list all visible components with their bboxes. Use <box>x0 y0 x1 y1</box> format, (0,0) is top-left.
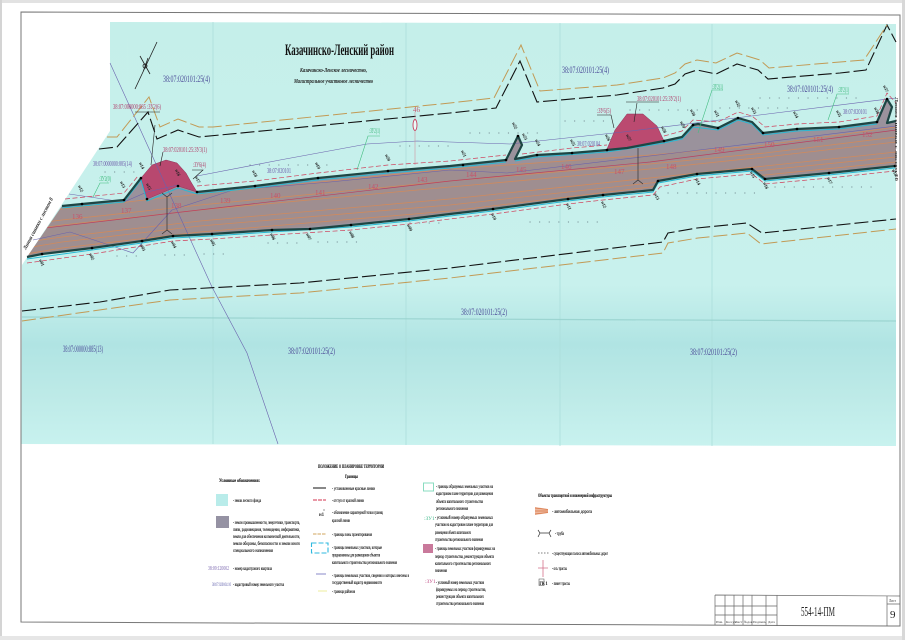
route picket numbers: 151 <box>813 136 824 144</box>
dark boundary lines <box>27 99 896 257</box>
node number labels: н13 <box>653 192 661 202</box>
registered plot item: - границы земельных участков, сведения о которых внесены в <box>332 574 409 579</box>
industrial land text: специального назначения <box>233 549 274 554</box>
forest land background <box>22 22 896 446</box>
node number labels: н12 <box>600 200 608 210</box>
node number labels: н23 <box>521 132 529 142</box>
node number labels: н30 <box>689 108 697 118</box>
temporary plot labels: :ЗУ6(5) <box>597 107 611 115</box>
node number labels: н16 <box>762 181 770 191</box>
node number labels: н22 <box>511 121 519 131</box>
column captions: Лист <box>735 620 743 624</box>
cadastral plot number: 38:07:020104:10 <box>212 582 231 588</box>
design zone item: - границы зоны проектирования <box>332 533 372 538</box>
node number labels: н36 <box>873 106 881 116</box>
node number labels: н16 <box>174 168 182 178</box>
node number labels: н10 <box>490 212 498 222</box>
node number labels: н13 <box>119 180 127 190</box>
route picket numbers: 136 <box>72 213 83 221</box>
panel: map <box>20 22 899 446</box>
industrial land text <box>233 521 300 554</box>
node number labels: н19 <box>314 161 322 171</box>
temporary plot number item: реконструкции объекта капитального <box>436 595 484 600</box>
formed plot labels: :ЗУ2(1) <box>369 127 380 135</box>
map subtitle <box>293 67 373 85</box>
route picket item: - пикет трассы <box>552 582 570 587</box>
node number labels: н12 <box>77 184 85 194</box>
red lines item: - установленные красные линии <box>332 487 375 492</box>
formed plot boundary item: объекта капитального строительства <box>436 500 483 505</box>
drawing code: 554-14-ПМ <box>801 605 835 620</box>
node number labels: н18 <box>251 169 259 179</box>
node number labels: н15 <box>749 170 757 180</box>
route picket numbers: 141 <box>315 189 326 197</box>
node number labels: н01 <box>38 258 46 268</box>
cadastral plot labels: 38:07:020104 <box>577 140 600 148</box>
cadastral plot number: - кадастровый номер земельного участка <box>233 583 284 588</box>
node number labels: н31 <box>713 109 721 119</box>
route picket numbers: 147 <box>614 168 625 176</box>
node number labels: н02 <box>88 252 96 262</box>
route picket numbers: 142 <box>368 183 379 191</box>
formed plot number item: - условный номер образуемых земельных <box>435 516 493 521</box>
cyan under edge <box>27 120 895 259</box>
node number labels: н15 <box>145 182 153 192</box>
temporary plot labels <box>113 95 681 169</box>
cadastral quarter number: 38:09:120002 <box>208 566 229 572</box>
cadastral plot number <box>212 582 284 588</box>
swatch: industrial land <box>216 516 229 528</box>
offset item: - отступ от красной линии <box>332 499 364 504</box>
bracket and leaders <box>135 102 659 179</box>
node number labels: н33 <box>750 106 758 116</box>
formed plot boundary item: - границы образуемых земельных участков на <box>436 485 493 490</box>
infrastructure heading: Объекты транспортной и инженерной инфраструктуры <box>538 494 612 499</box>
outer boundary dashed tan south <box>22 229 896 321</box>
formed plot labels: :ЗУ2(0) <box>99 175 111 183</box>
forest land text: - земли лесного фонда <box>233 499 261 504</box>
node number labels: н04 <box>170 240 178 250</box>
cadastral plot labels: 38:07:020101:25(2) <box>288 346 335 356</box>
swatch: forest land <box>216 494 228 506</box>
temporary plot boundary item: период строительства, реконструкции объекта <box>435 555 494 560</box>
node number labels: н08 <box>348 230 356 240</box>
cadastral plot labels: 38:07:020101:25(2) <box>690 347 737 357</box>
pipe item: - труба <box>555 532 564 537</box>
planning heading: ПОЛОЖЕНИЕ О ПЛАНИРОВКЕ ТЕРРИТОРИИ <box>318 465 384 470</box>
legend heading: Условные обозначения: <box>219 479 260 484</box>
point item <box>319 509 383 524</box>
legend: column one <box>208 479 300 588</box>
point item: н1 <box>319 513 325 518</box>
legend: column two <box>312 465 409 595</box>
cadastral plot labels: 38:07:020101:25(4) <box>787 84 833 94</box>
node number labels: н07 <box>305 232 313 242</box>
cadastral plot labels: 38:07:020101:25(4) <box>163 74 210 84</box>
formed plot labels: :ЗУ2(1) <box>712 83 723 91</box>
map subtitle: Магистральное участковое лесничество <box>293 78 373 85</box>
column captions: Кол.уч <box>726 620 736 624</box>
formed plot number item: :ЗУ1 <box>424 516 435 522</box>
node number labels: н21 <box>460 149 468 159</box>
route axis item: - ось трассы <box>552 567 567 572</box>
icon: compass <box>135 42 157 89</box>
cadastral plot labels: 38:07:020101 <box>267 167 291 175</box>
culvert symbols <box>162 148 643 234</box>
red picket line <box>414 112 416 165</box>
cadastral quarter number: - номер кадастрового квартала <box>233 567 272 572</box>
title block <box>715 595 900 626</box>
existing road strip item: - существующая полоса автомобильных дорог <box>552 552 608 557</box>
node number labels: н28 <box>660 125 668 135</box>
maroon temporary plot 2 <box>607 114 664 149</box>
temporary plot boundary item: - границы земельных участков формируемых на <box>435 547 495 552</box>
route picket item <box>539 579 570 587</box>
cadastral plot labels: 38:07:020101:25(2) <box>461 307 507 317</box>
survey dots <box>105 98 880 256</box>
boundary nodes <box>41 98 896 255</box>
node number labels: н37 <box>882 84 890 94</box>
cyan plot item: капитального строительства регионального значения <box>332 561 397 566</box>
route picket numbers: 140 <box>270 192 281 200</box>
node number labels: н25 <box>569 138 577 148</box>
route picket numbers: 145 <box>516 166 527 174</box>
district boundary item: - граница районов <box>332 590 355 595</box>
node number labels: н20 <box>384 153 392 163</box>
node number labels: н03 <box>139 243 147 253</box>
column captions: Подпись <box>753 620 766 624</box>
temporary plot boundary item: капитального строительства регионального <box>435 562 491 567</box>
purple cadastral lines <box>33 63 896 444</box>
cadastral plot labels <box>63 65 867 357</box>
node number labels: н14 <box>138 161 146 171</box>
sheet caption: Лист <box>889 598 896 603</box>
cadastral plot labels: 38:07:020101 <box>843 108 867 116</box>
industrial land text: связи, радиовещания, телевидения, информатики, <box>233 528 300 533</box>
green leader lines <box>93 90 849 197</box>
registered plot item <box>316 574 409 586</box>
column captions: Изм. <box>716 620 723 624</box>
temporary plot number item: формируемых на период строительства, <box>436 588 486 593</box>
legend: column four <box>535 494 612 587</box>
maroon temporary plot 1 <box>141 160 197 199</box>
registered plot item: государственный кадастр недвижимости <box>332 581 382 586</box>
cadastral plot labels: 38:07:000000:885(13) <box>63 344 103 354</box>
node number labels: н24 <box>534 138 542 148</box>
formed plot labels: :ЗУ2(1) <box>838 86 849 94</box>
route picket numbers: 149 <box>714 146 725 154</box>
node number labels: н34 <box>792 110 800 120</box>
temporary plot number item <box>425 579 486 607</box>
industrial land text: земли обороны, безопасности и земли иного <box>233 542 300 547</box>
node number labels: н09 <box>406 223 414 233</box>
formed plot labels <box>99 83 849 183</box>
red picket marker <box>413 120 417 130</box>
column captions <box>716 620 775 624</box>
temporary plot number item: строительства регионального значения <box>436 602 484 607</box>
route picket numbers: 150 <box>764 141 775 149</box>
formed plot boundary item: кадастровом плане территории для размещения <box>436 492 493 497</box>
route picket numbers: 144 <box>466 171 477 179</box>
route picket numbers: 148 <box>666 163 677 171</box>
temporary plot labels: 38:07:020101:25:ЗУ2(1) <box>637 95 681 103</box>
formed plot number item: участков на кадастровом плане территории для <box>435 523 493 528</box>
formed plot boundary item <box>424 483 493 512</box>
column captions: №док <box>744 620 753 624</box>
node number labels: н35 <box>835 109 843 119</box>
red offset lines <box>27 93 896 263</box>
sheet number: 9 <box>890 609 896 621</box>
node number labels: н11 <box>565 202 573 211</box>
outer boundary dashed black north <box>99 25 896 149</box>
column captions: Дата <box>768 620 775 624</box>
legend: column three <box>423 483 495 607</box>
cadastral plot labels: 38:07:020101:25(4) <box>562 65 609 75</box>
node number labels: н17 <box>826 176 834 186</box>
cyan plot item: - границы земельных участков, которые <box>332 546 382 551</box>
point item: красной линии <box>332 519 350 524</box>
boundaries heading: Границы <box>345 475 358 480</box>
node number labels: н26 <box>604 133 612 143</box>
cyan plot item <box>312 543 397 566</box>
node number labels <box>38 84 899 268</box>
temporary plot labels: :ЗУ6(4) <box>193 161 206 169</box>
cadastral quarter number <box>208 566 272 572</box>
road item: - автомобильная дорога <box>552 510 593 515</box>
point item: - обозначение характерной точки границ <box>332 511 383 516</box>
sheet joint label right: Линия сшивки с листом 10 <box>894 97 899 182</box>
node number labels: н27 <box>625 133 633 143</box>
node number labels: н29 <box>679 120 687 130</box>
route picket numbers <box>72 106 873 221</box>
route picket item: ГК 1 <box>540 582 548 587</box>
industrial land text: земли для обеспечения космической деятельности, <box>233 535 300 540</box>
route picket numbers: 146 <box>561 163 572 171</box>
temporary plot boundary item <box>423 544 495 574</box>
cadastral plot labels: 38:07:0000000:885(14) <box>93 160 132 168</box>
industrial land text: - земли промышленности, энергетики, транспорта, <box>233 521 300 526</box>
route picket numbers: 138 <box>171 202 182 210</box>
formed plot number item: строительства регионального значения <box>435 538 483 543</box>
node number labels: н17 <box>194 175 202 185</box>
node number labels: н18 <box>891 168 899 178</box>
outer boundary dashed tan north <box>107 25 887 137</box>
formed plot boundary item: регионального значения <box>436 507 468 512</box>
temporary plot boundary item: значения <box>435 569 447 574</box>
formed plot number item: размещения объекта капитального <box>435 531 471 536</box>
temporary plot number item: :ЗУ1 <box>425 579 436 585</box>
route picket numbers: 143 <box>417 176 428 184</box>
map subtitle: Казачинско-Ленское лесничество, <box>299 67 367 74</box>
temporary plot labels: 38:07:000000:885 :ЗУ2(6) <box>113 103 161 111</box>
node number labels: н06 <box>269 232 277 242</box>
temporary plot labels: 38:07:020101:25:ЗУ3(1) <box>163 146 207 154</box>
formed plot number item <box>424 516 493 543</box>
route picket numbers: 152 <box>862 131 873 139</box>
node number labels: н05 <box>209 238 217 248</box>
route picket numbers: 137 <box>121 207 132 215</box>
temporary plot number item: - условный номер земельных участков <box>436 581 484 586</box>
route picket numbers: 46 <box>413 106 420 114</box>
map title: Казачинско-Ленский район <box>285 42 394 59</box>
node number labels: н32 <box>734 99 742 109</box>
node number labels: н14 <box>694 177 702 187</box>
outer boundary dashed black south <box>22 219 896 311</box>
route picket numbers: 139 <box>220 197 231 205</box>
corridor land plot <box>20 99 896 258</box>
cyan plot item: предназначены для размещения объектов <box>332 554 380 558</box>
sheet joint label left: Линия сшивки с листом 8 <box>22 197 55 252</box>
